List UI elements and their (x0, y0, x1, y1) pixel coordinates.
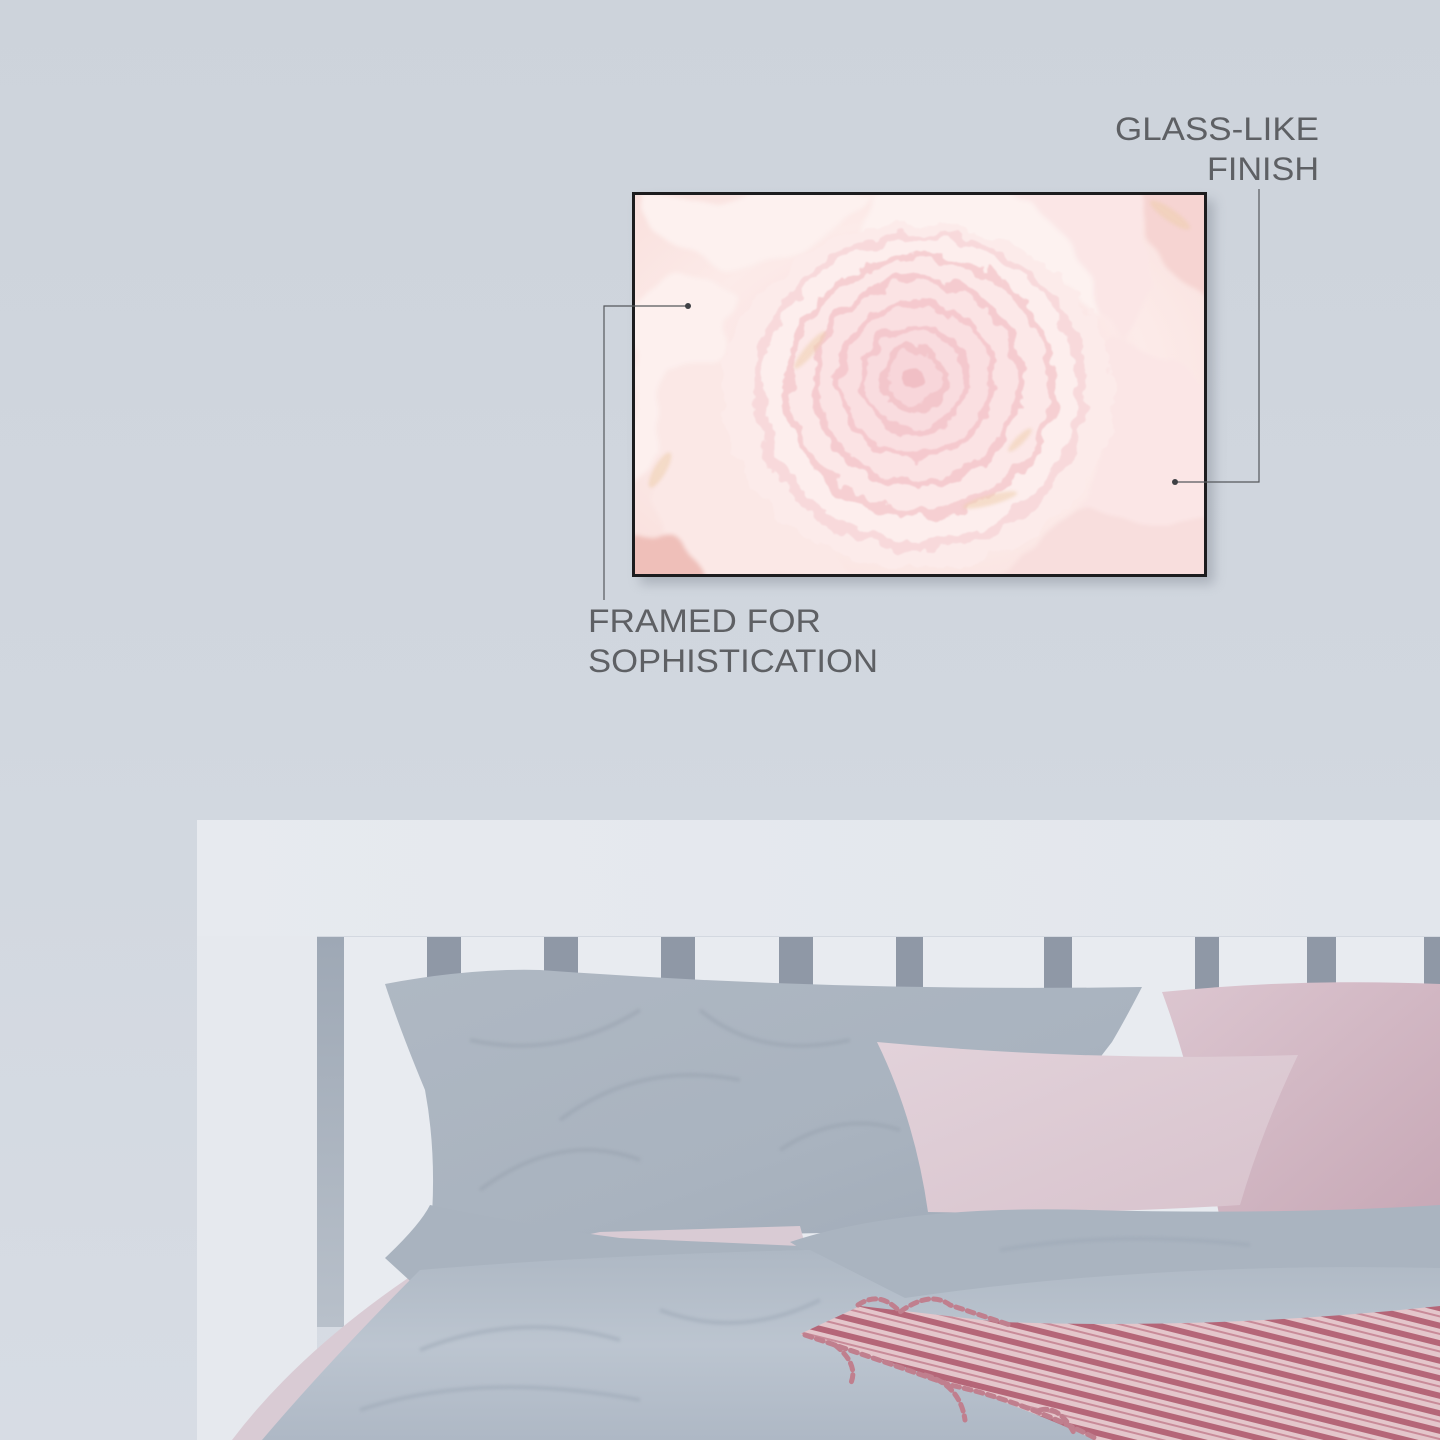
pink sheet (232, 1226, 820, 1440)
leader dot: glass-like finish (1172, 479, 1178, 485)
leader line: framed (604, 306, 688, 600)
duvet creases (360, 1239, 1250, 1410)
label: glass-like finish: GLASS-LIKE (1115, 111, 1319, 147)
pink back pillow (1162, 982, 1440, 1220)
duvet right lobe (790, 1205, 1440, 1310)
rose rings (752, 227, 1090, 555)
label: framed: FRAMED FOR (588, 603, 821, 639)
black frame (632, 192, 1207, 577)
gray pillow (385, 970, 1142, 1240)
striped throw blanket (800, 1299, 1440, 1440)
infographic scene (197, 117, 1440, 1440)
duvet body (262, 1250, 1440, 1440)
leader line: glass-like finish (1175, 189, 1259, 482)
duvet (262, 1205, 1440, 1440)
callout: framed for sophistication (588, 303, 878, 679)
frame shadow (640, 200, 1214, 584)
rose image (625, 186, 1214, 584)
label: framed: SOPHISTICATION (588, 643, 878, 679)
pink front pillow (877, 1042, 1298, 1213)
outer petals (625, 186, 1214, 584)
headboard gap (317, 937, 344, 1327)
label: glass-like finish: FINISH (1207, 151, 1319, 187)
headboard (197, 820, 1440, 1440)
gold flecks (645, 196, 1193, 512)
headboard left post (197, 936, 317, 1440)
duvet pillow lobe (385, 1205, 830, 1290)
fringe (805, 1299, 1095, 1438)
leader dot: framed (685, 303, 691, 309)
headboard slats (344, 937, 1440, 1357)
framed artwork (625, 186, 1214, 584)
callout: glass-like finish (1115, 111, 1319, 485)
headboard slots (427, 937, 1440, 997)
headboard top rail (197, 820, 1440, 936)
pillow creases (470, 1010, 900, 1190)
